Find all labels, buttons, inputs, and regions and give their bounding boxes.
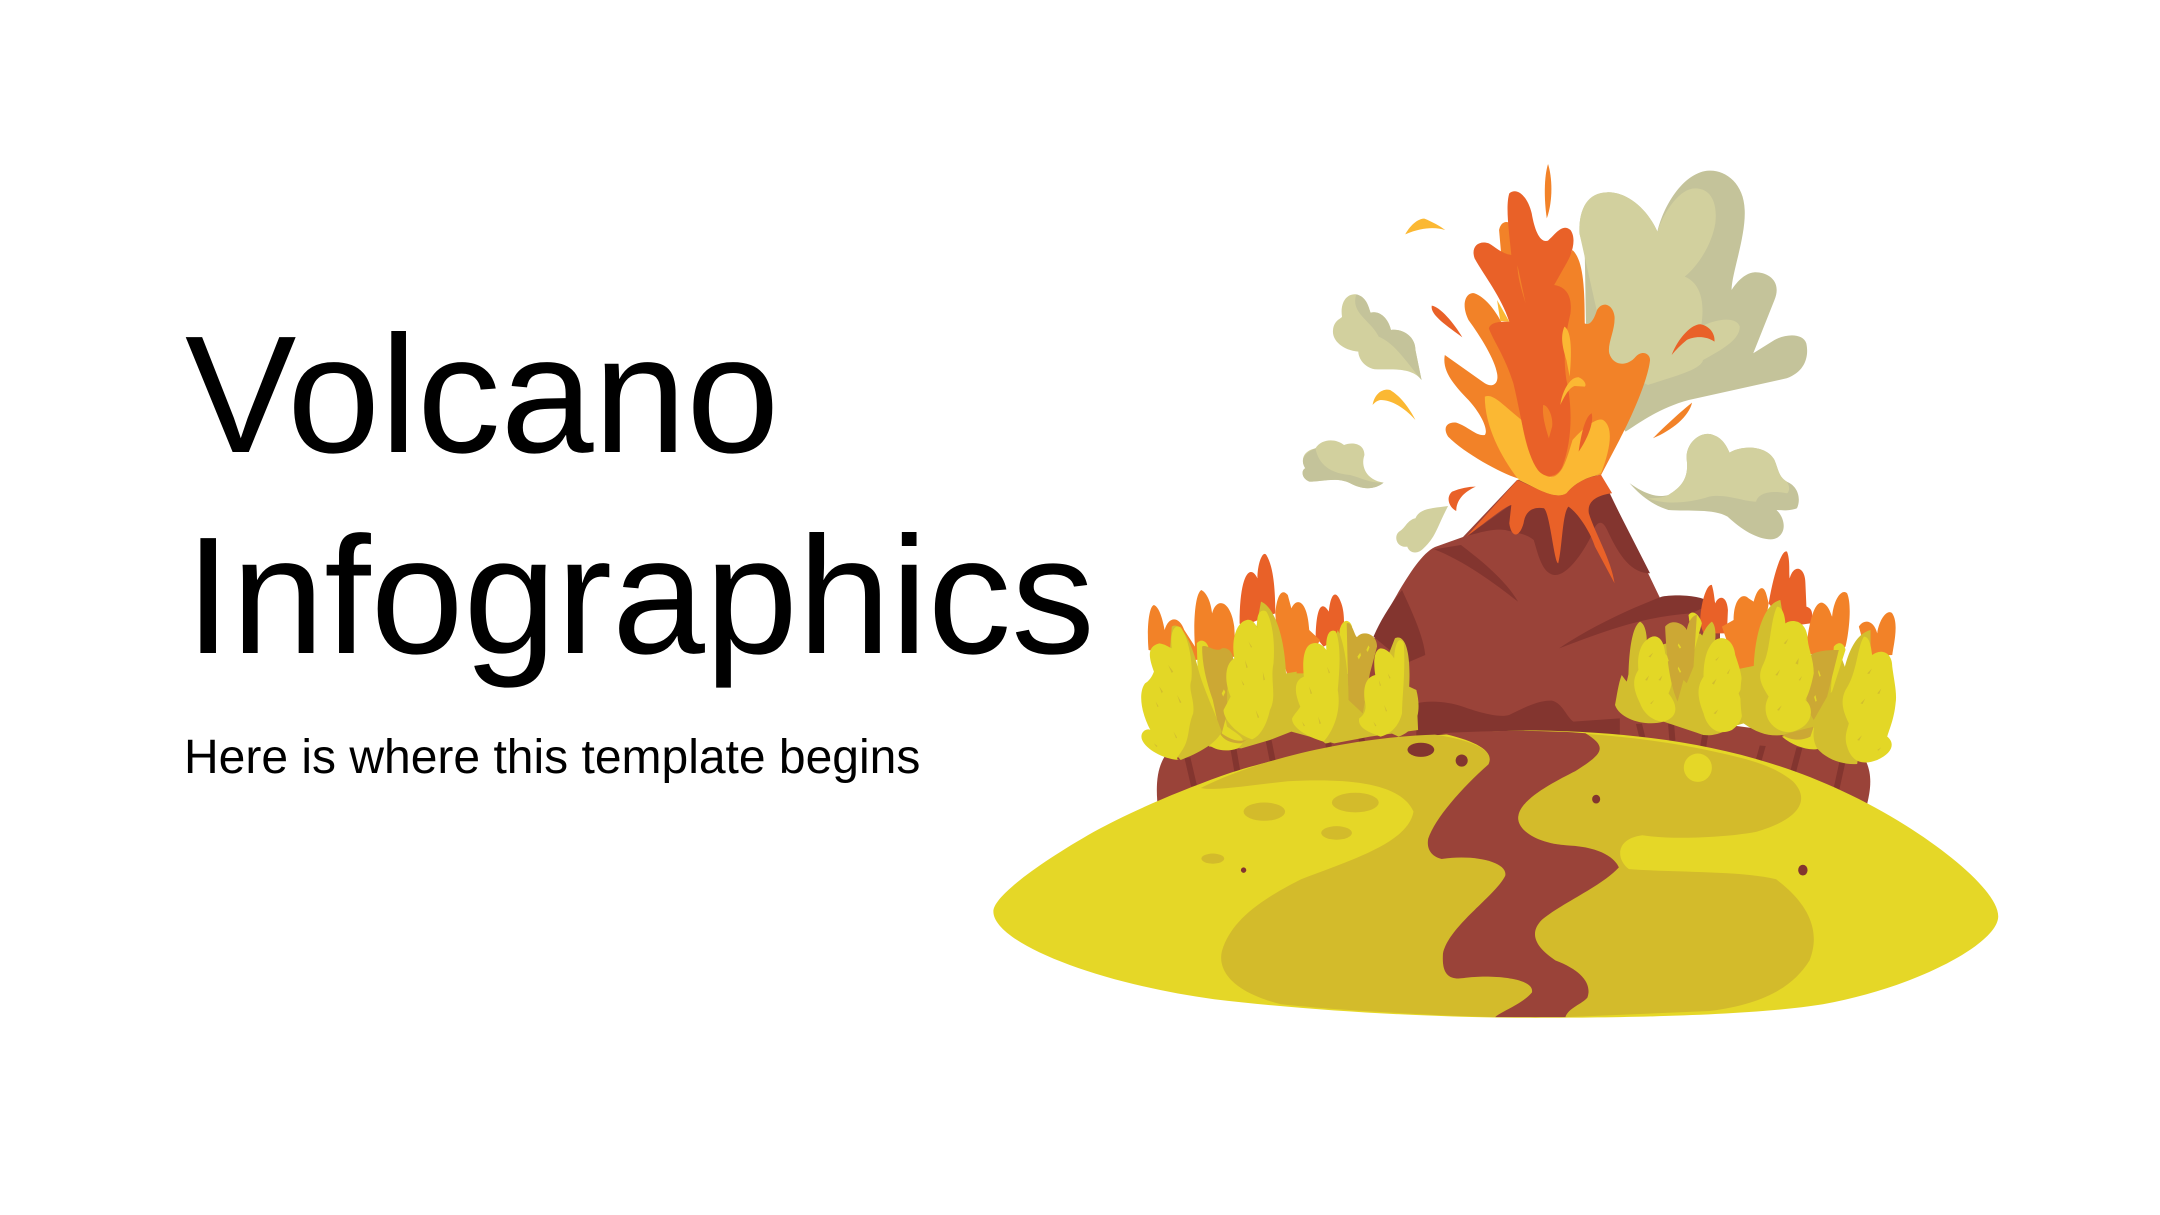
tree: mustard back left <box>1665 613 1702 703</box>
tree: third <box>1740 600 1814 735</box>
leaf marks <box>1645 639 1881 751</box>
smoke puff lower left <box>1396 506 1448 553</box>
mountain body <box>1360 475 1720 760</box>
yellow flame base <box>1485 396 1610 495</box>
subtitle: Here is where this template begins <box>184 731 920 784</box>
title: Infographics <box>185 503 1095 689</box>
right group of trees <box>1615 600 1896 764</box>
title: Volcano <box>185 302 779 488</box>
lava river <box>1428 731 1619 1017</box>
tree: mustard back right <box>1782 643 1845 749</box>
red flame core <box>1474 191 1574 476</box>
big smoke cloud <box>1579 171 1807 432</box>
sparks <box>1373 164 1715 511</box>
tree: right <box>1359 638 1419 737</box>
title <box>185 302 1095 689</box>
tree: first <box>1615 622 1675 723</box>
darker yellow patch left <box>1201 735 1532 1017</box>
ground spots <box>1201 793 1379 864</box>
smoke puff upper left <box>1333 294 1422 380</box>
crater, flames and smoke <box>1303 164 1807 553</box>
tree foliage backing <box>1191 673 1418 748</box>
tree foliage backing <box>1620 633 1867 748</box>
tree: center <box>1224 602 1297 739</box>
smoke puff right <box>1630 434 1799 539</box>
orange flame layer <box>1444 222 1650 478</box>
rim of hill behind the trees <box>1157 710 1870 818</box>
mountain shading <box>1373 545 1713 740</box>
tree: center right <box>1292 630 1359 743</box>
darker yellow patch right <box>1518 734 1814 1017</box>
tree: mustard back left <box>1197 641 1249 750</box>
tree: fourth <box>1814 630 1896 764</box>
island ground <box>993 731 1998 1018</box>
tree: mustard back right <box>1340 621 1377 713</box>
smoke puff middle left <box>1303 440 1384 488</box>
volcano top with lava streams <box>1466 473 1650 583</box>
tree: second <box>1676 622 1743 735</box>
flames behind left trees <box>1148 554 1344 677</box>
leaf marks <box>1154 642 1391 747</box>
tree trunks <box>1187 724 1843 790</box>
flame details <box>1497 265 1592 452</box>
bright yellow hill <box>993 731 1998 1018</box>
tree: left <box>1141 625 1222 760</box>
left group of trees <box>1141 602 1419 760</box>
flames behind right trees <box>1700 551 1896 691</box>
